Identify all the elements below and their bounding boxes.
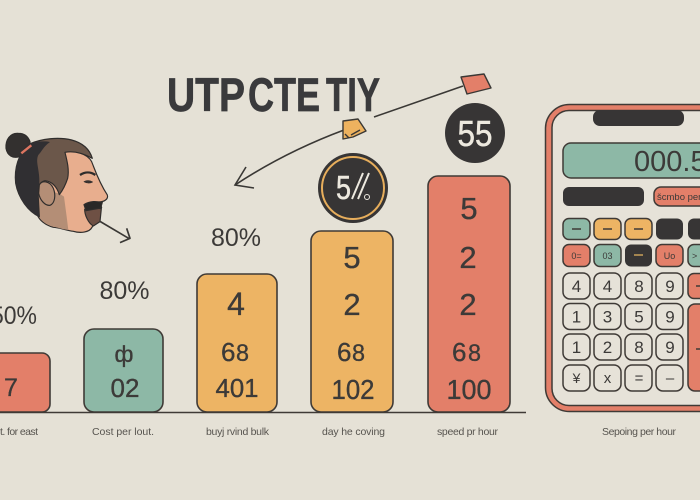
title: UTP bbox=[167, 68, 245, 121]
bar 1 bbox=[0, 353, 50, 412]
key digits: ¥ bbox=[572, 370, 581, 386]
key digits: 5 bbox=[634, 308, 644, 326]
eye bbox=[84, 181, 93, 183]
badge: 55: 55 bbox=[458, 113, 492, 154]
icon: orange tag bbox=[343, 119, 366, 139]
hair back bbox=[15, 138, 92, 217]
key digits: 4 bbox=[603, 277, 612, 296]
function keys row 2 bbox=[563, 244, 700, 266]
display bbox=[563, 143, 700, 178]
hair tie bbox=[21, 145, 31, 153]
ear bbox=[39, 182, 55, 205]
calculator body bbox=[546, 104, 700, 412]
badge: 55 bbox=[445, 103, 505, 163]
function keys row 1 bbox=[563, 218, 700, 240]
bar 1: 7 bbox=[4, 374, 18, 402]
icon: red tag bbox=[461, 74, 491, 94]
combo pill bbox=[654, 187, 700, 206]
icon: man head bbox=[6, 133, 130, 243]
key digits: 8 bbox=[634, 338, 644, 357]
bar 4: 2 bbox=[343, 287, 361, 322]
bar 5 bbox=[428, 176, 510, 412]
title bbox=[167, 68, 380, 121]
bar 4: 5 bbox=[343, 240, 361, 275]
curved arrow bbox=[235, 130, 344, 188]
badge: 5%: 5 bbox=[336, 169, 351, 206]
function keys row 2: 0= bbox=[571, 251, 582, 261]
function keys row 2: Uo bbox=[664, 251, 675, 261]
bar 3: 401 bbox=[216, 373, 258, 403]
line to red tag bbox=[374, 86, 463, 117]
percent label 3: 80% bbox=[211, 224, 261, 252]
shaded jaw bbox=[38, 187, 68, 230]
number keys bbox=[563, 273, 683, 391]
bar 5: 6 bbox=[452, 337, 466, 367]
key digits: x bbox=[604, 370, 612, 387]
bar 4 bbox=[311, 231, 393, 412]
bar 3: 4 bbox=[227, 286, 245, 322]
bar 4: 6 bbox=[337, 337, 351, 367]
title: CTE bbox=[248, 68, 320, 121]
bar 2: 02 bbox=[111, 373, 139, 403]
bar labels: buyj rvind bulk bbox=[206, 426, 270, 438]
key digits: 1 bbox=[572, 338, 581, 357]
bar 5: 2 bbox=[459, 240, 477, 275]
calculator bbox=[546, 104, 700, 412]
bar 3: 6 bbox=[221, 337, 235, 367]
key digits: 3 bbox=[603, 308, 612, 326]
bar labels: speed pr hour bbox=[437, 426, 498, 438]
dark bar bbox=[563, 187, 644, 206]
moustache bbox=[84, 202, 102, 211]
bar 5: 2 bbox=[459, 287, 477, 322]
key digits: 1 bbox=[572, 308, 581, 326]
key digits: 2 bbox=[603, 338, 612, 357]
bar 5: 100 bbox=[446, 374, 492, 405]
bar 3 bbox=[197, 274, 277, 412]
bar 4: 8 bbox=[352, 340, 365, 367]
key digits: 8 bbox=[634, 277, 644, 296]
key digits: 9 bbox=[665, 277, 675, 296]
bar labels: day he coving bbox=[322, 426, 385, 438]
key digits: 9 bbox=[665, 308, 675, 326]
key digits bbox=[572, 277, 675, 387]
hair dark back part bbox=[15, 141, 50, 217]
title: TIY bbox=[326, 68, 380, 121]
eyebrow bbox=[80, 172, 95, 175]
chart baseline bbox=[0, 412, 526, 414]
red side keys bbox=[688, 274, 700, 391]
percent label 2: 80% bbox=[99, 277, 150, 305]
bar 5: 5 bbox=[460, 191, 478, 226]
key digits: 9 bbox=[665, 338, 675, 357]
bar labels: Sepoing per hour bbox=[602, 426, 676, 438]
function keys row 2: > bbox=[692, 251, 697, 261]
key digits: – bbox=[666, 370, 675, 387]
bar labels: Cost per lout. bbox=[92, 426, 154, 438]
skin bbox=[37, 151, 108, 232]
bar labels bbox=[0, 426, 676, 438]
bar 4: 102 bbox=[332, 374, 374, 405]
function keys row 2: 03 bbox=[602, 251, 613, 261]
notch bbox=[593, 110, 684, 126]
mouth bbox=[85, 208, 101, 226]
key digits: 4 bbox=[572, 277, 581, 296]
arrow from mouth bbox=[99, 221, 130, 243]
badge: 5% bbox=[318, 153, 388, 223]
bar 2 bbox=[84, 329, 163, 412]
bar 5: 8 bbox=[468, 340, 481, 367]
key digits: = bbox=[635, 370, 644, 387]
hair bun bbox=[6, 133, 30, 157]
bar 2: ф bbox=[115, 341, 133, 367]
bar 3: 8 bbox=[236, 340, 249, 367]
bar labels: t. for east bbox=[0, 426, 38, 438]
